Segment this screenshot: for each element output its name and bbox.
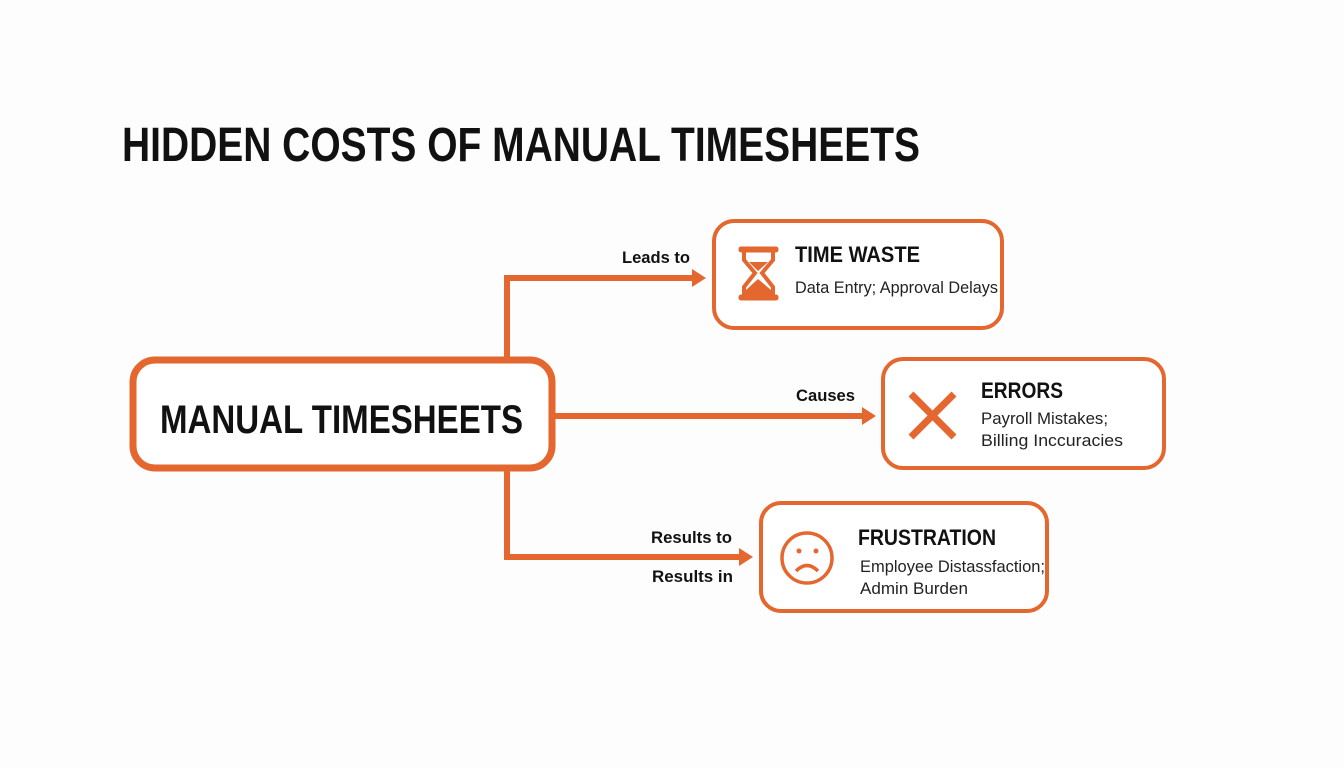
icon: hourglass — [739, 247, 778, 300]
panel: errors: Billing Inccuracies — [981, 431, 1123, 450]
panel: frustration: Admin Burden — [860, 579, 968, 598]
panel: manual timesheets — [133, 360, 552, 468]
arrow: leads to: Leads to — [622, 248, 690, 267]
panel: frustration: Employee Distassfaction; — [860, 557, 1045, 576]
arrow: results — [507, 471, 753, 586]
panel: errors — [883, 359, 1164, 468]
arrow: leads to — [507, 248, 706, 357]
panel: errors: Payroll Mistakes; — [981, 409, 1108, 428]
panel: time waste: TIME WASTE — [795, 242, 920, 267]
arrow: causes — [555, 386, 876, 425]
icon: x mark — [911, 394, 954, 437]
icon: sad face — [782, 533, 832, 583]
panel: time waste — [714, 221, 1002, 328]
arrow: results: Results in — [652, 567, 733, 586]
title: HIDDEN COSTS OF MANUAL TIMESHEETS — [122, 119, 920, 172]
panel: time waste: Data Entry; Approval Delays — [795, 278, 998, 297]
panel: frustration — [761, 503, 1047, 611]
panel: frustration: FRUSTRATION — [858, 525, 996, 550]
arrow: results: Results to — [651, 528, 732, 547]
panel: manual timesheets: MANUAL TIMESHEETS — [160, 398, 523, 442]
panel: errors: ERRORS — [981, 378, 1063, 403]
arrow: causes: Causes — [796, 386, 855, 405]
